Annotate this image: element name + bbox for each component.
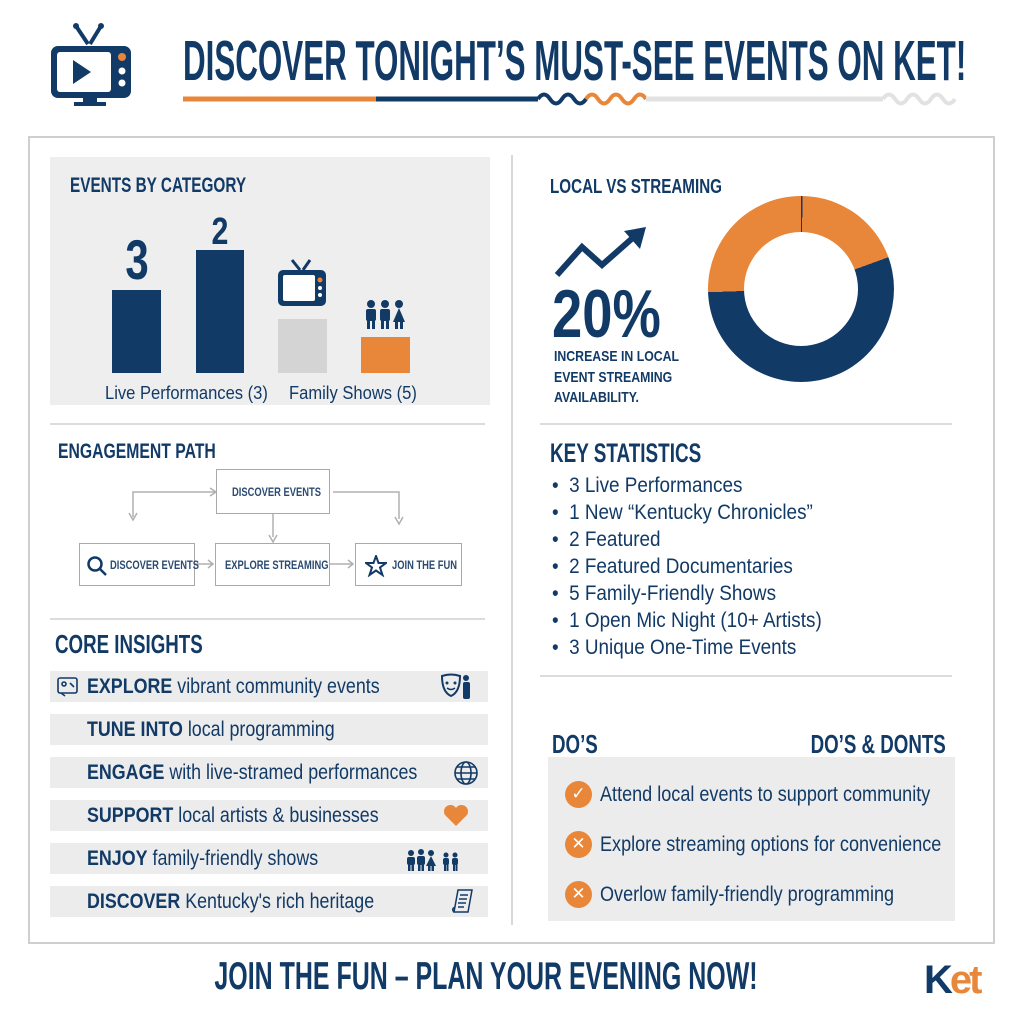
title underline bbox=[183, 92, 956, 106]
vertical divider bbox=[511, 155, 513, 925]
main frame bbox=[28, 136, 995, 944]
donut chart bbox=[708, 196, 894, 382]
panel: local vs streaming bbox=[550, 176, 894, 406]
heading: ENGAGEMENT PATH bbox=[58, 440, 216, 463]
stat caption bbox=[554, 348, 679, 406]
insight rows: ENJOY family-friendly shows bbox=[87, 847, 318, 870]
footer call to action: JOIN THE FUN – PLAN YOUR EVENING NOW! bbox=[214, 955, 758, 998]
heading: dos: DO’S bbox=[552, 729, 598, 759]
bar chart bbox=[105, 211, 417, 403]
bar chart: 2 bbox=[212, 211, 228, 253]
title: DISCOVER TONIGHT’S MUST-SEE EVENTS ON KET! bbox=[183, 29, 966, 93]
stat 20%: 20% bbox=[552, 276, 661, 352]
bar chart: 3 bbox=[125, 228, 149, 291]
heading: EVENTS BY CATEGORY bbox=[70, 174, 246, 197]
stat list bbox=[552, 474, 822, 659]
heading: CORE INSIGHTS bbox=[55, 629, 203, 659]
logo: ket: Ket bbox=[924, 958, 979, 1002]
insight rows: TUNE INTO local programming bbox=[87, 718, 335, 741]
heading: KEY STATISTICS bbox=[550, 438, 701, 468]
stat list: • 2 Featured bbox=[552, 528, 661, 551]
stat caption: EVENT STREAMING bbox=[554, 368, 672, 386]
list box: Overlow family-friendly programming bbox=[600, 882, 894, 906]
panel: events by category bbox=[50, 157, 490, 405]
stat list: • 2 Featured Documentaries bbox=[552, 555, 793, 578]
list box: ✓ bbox=[571, 784, 586, 804]
flow diagram: DISCOVER EVENTS bbox=[110, 558, 199, 572]
icon: trend arrow bbox=[554, 227, 646, 277]
bar chart: Family Shows (5) bbox=[289, 383, 417, 403]
stat list: • 1 New “Kentucky Chronicles” bbox=[552, 501, 813, 524]
panel: key statistics bbox=[550, 438, 822, 659]
flow diagram: JOIN THE FUN bbox=[392, 558, 457, 572]
list box: ✕ bbox=[571, 884, 586, 904]
flow diagram: EXPLORE STREAMING bbox=[225, 558, 328, 572]
panel: engagement path bbox=[58, 440, 462, 586]
insight rows: SUPPORT local artists & businesses bbox=[87, 804, 379, 827]
flow diagram: DISCOVER EVENTS bbox=[232, 484, 321, 498]
heading: dos & donts: DO’S & DONTS bbox=[811, 729, 946, 759]
list box: Attend local events to support community bbox=[600, 782, 930, 806]
insight rows bbox=[50, 671, 488, 917]
bar chart: Live Performances (3) bbox=[105, 383, 268, 403]
stat list: • 1 Open Mic Night (10+ Artists) bbox=[552, 609, 822, 632]
insight rows: DISCOVER Kentucky's rich heritage bbox=[87, 890, 374, 913]
list box: ✕ bbox=[571, 834, 586, 854]
insight rows: ENGAGE with live-stramed performances bbox=[87, 761, 417, 784]
stat caption: AVAILABILITY. bbox=[554, 389, 639, 406]
flow diagram bbox=[79, 469, 462, 586]
list box bbox=[548, 757, 955, 921]
panel: dos and donts bbox=[548, 729, 955, 921]
insight rows: EXPLORE vibrant community events bbox=[87, 675, 380, 698]
stat list: • 3 Unique One-Time Events bbox=[552, 636, 796, 659]
stat list: • 3 Live Performances bbox=[552, 474, 742, 497]
list box: Explore streaming options for convenience bbox=[600, 832, 941, 856]
heading: LOCAL VS STREAMING bbox=[550, 176, 722, 198]
stat list: • 5 Family-Friendly Shows bbox=[552, 582, 776, 605]
icon: tv bbox=[51, 23, 131, 106]
stat caption: INCREASE IN LOCAL bbox=[554, 348, 679, 365]
